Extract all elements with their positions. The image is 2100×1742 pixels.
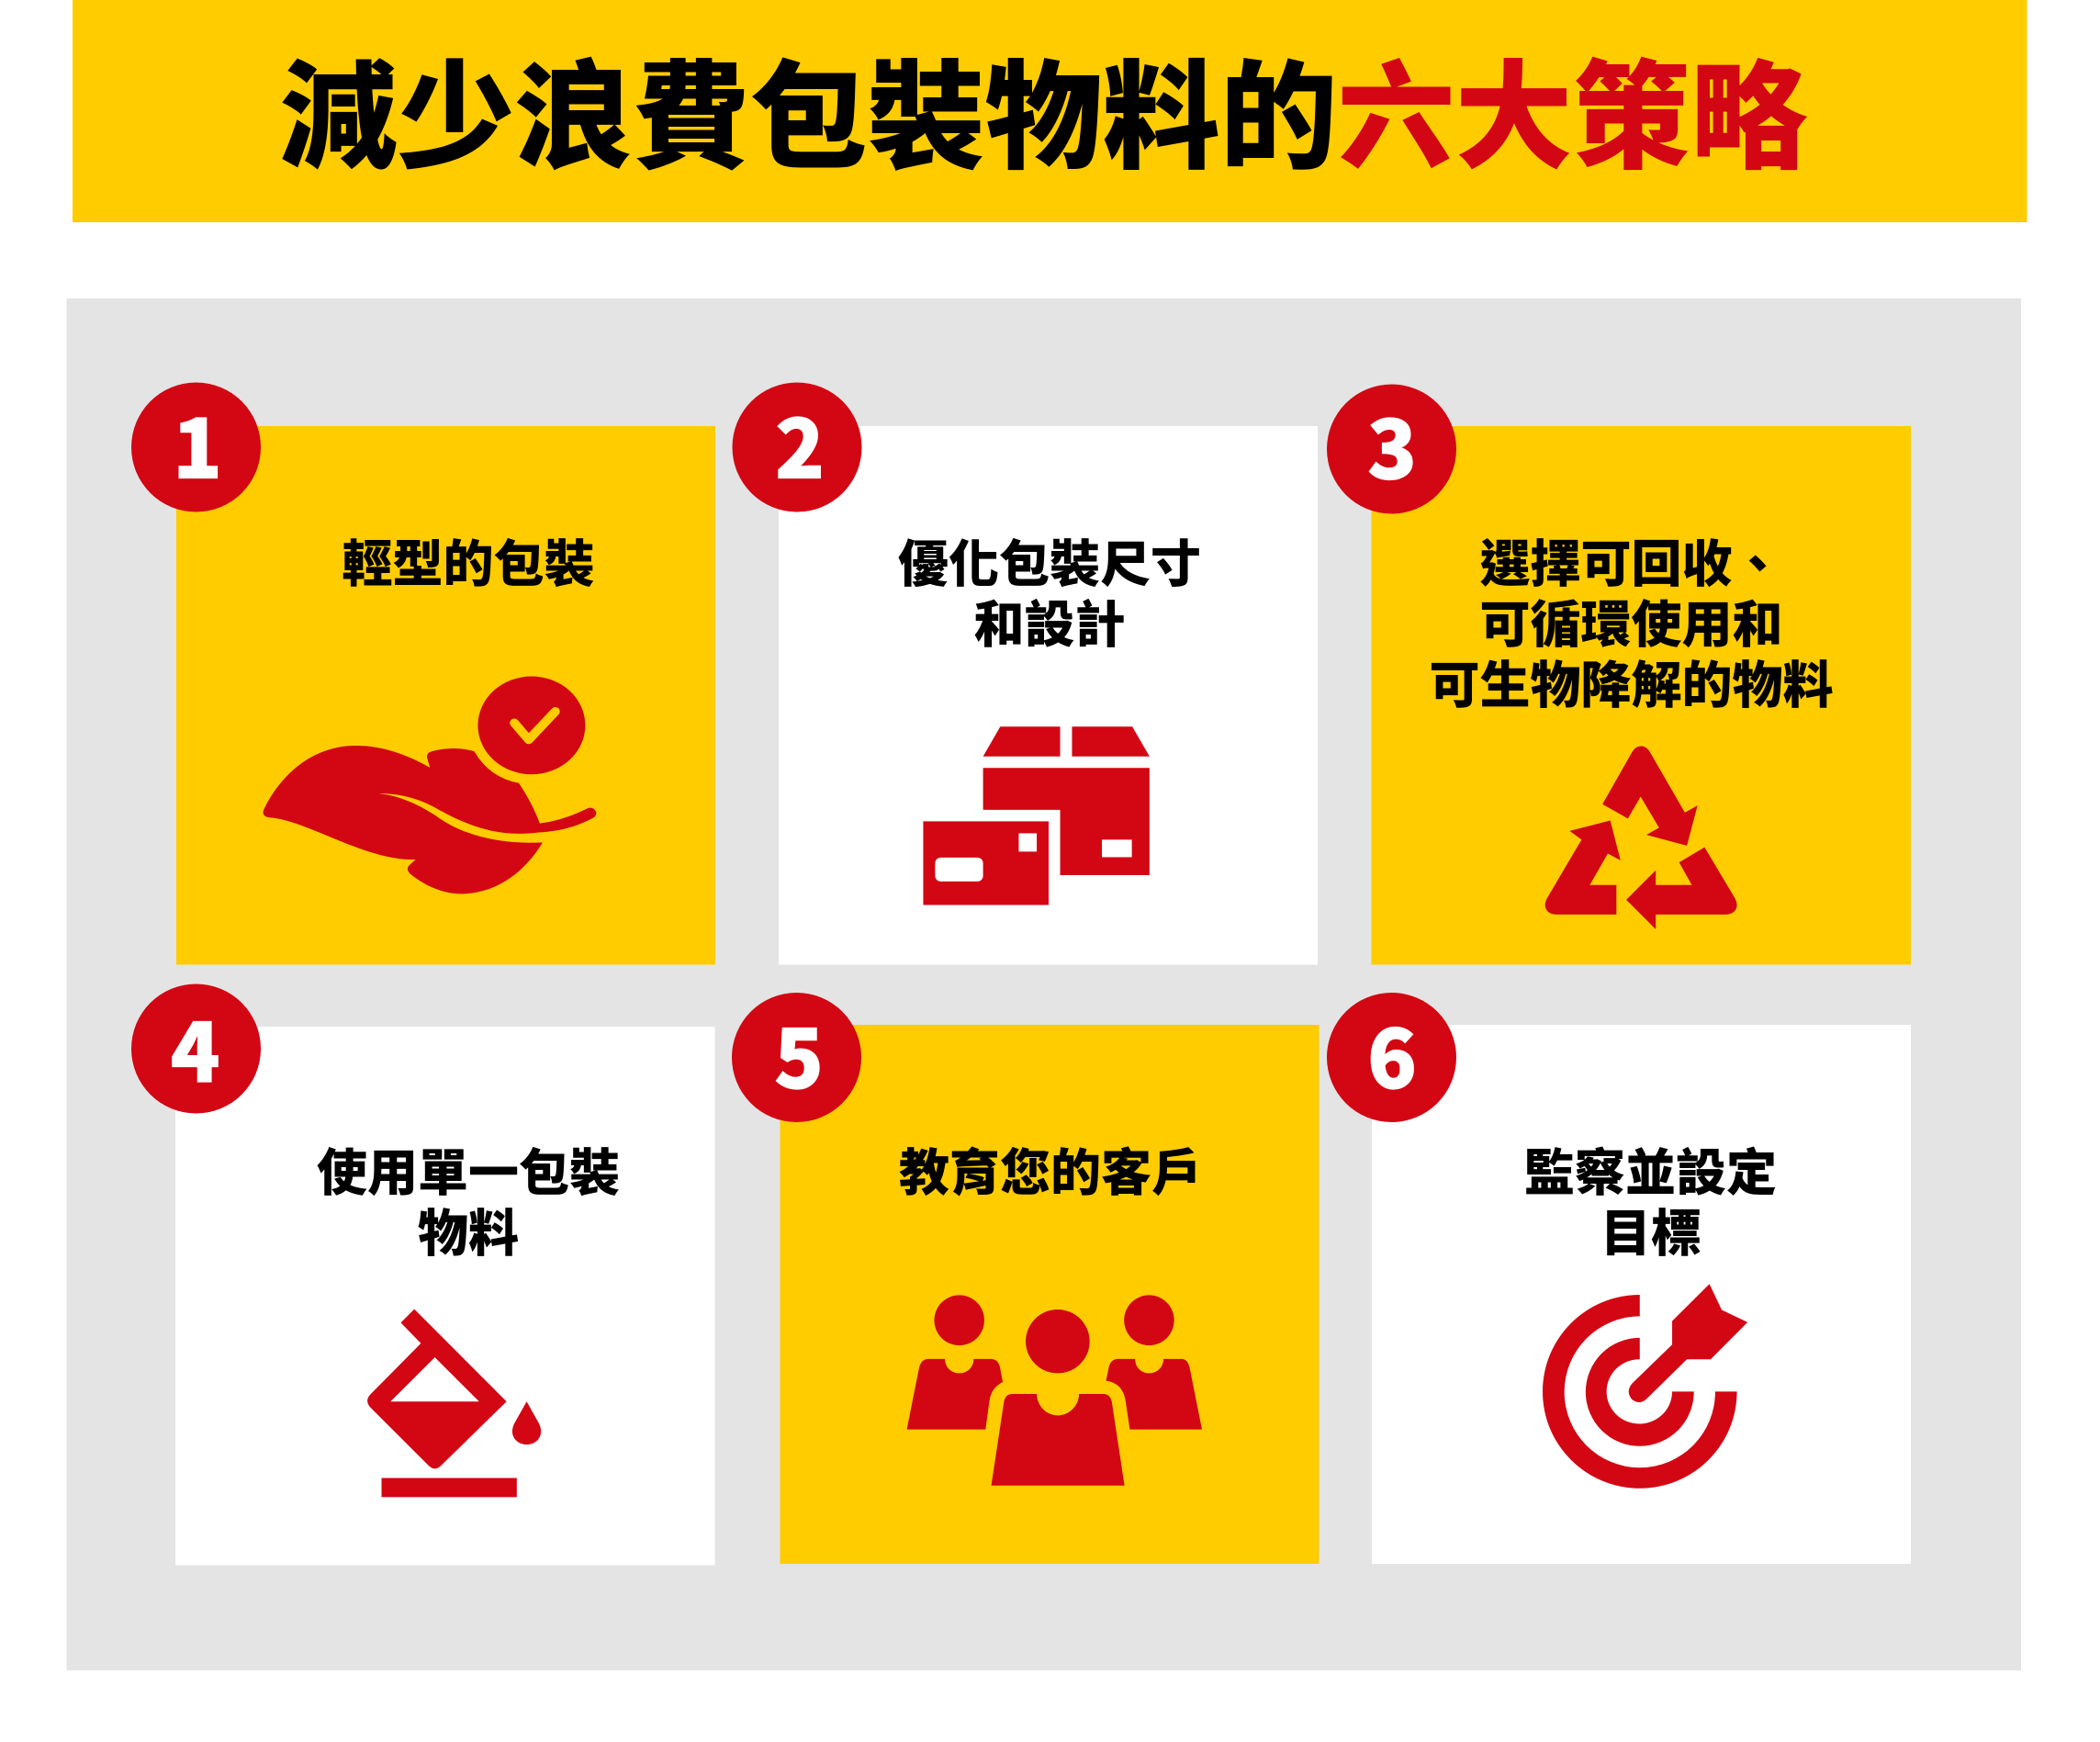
heading 3: 可生物降解的物料 — [1429, 645, 1834, 718]
number badge 2 — [733, 382, 861, 512]
heading 3: 選擇可回收、 — [1479, 523, 1783, 597]
number badge 6: 6 — [1367, 995, 1417, 1112]
number badge 1 — [131, 382, 261, 512]
panel: card 2 optimise size and design — [733, 382, 1318, 964]
number badge 5: 5 — [774, 995, 824, 1112]
panel: strategies background — [66, 298, 2021, 1670]
title banner — [73, 0, 2027, 222]
icon: recycle arrows — [1545, 747, 1737, 929]
heading 6: 目標 — [1600, 1193, 1701, 1266]
heading 4: 使用單一包裝 — [317, 1132, 620, 1206]
number badge 3 — [1327, 384, 1456, 514]
number badge 1: 1 — [173, 386, 222, 501]
number badge 4: 4 — [171, 989, 219, 1106]
heading 1: 輕型的包裝 — [342, 523, 595, 597]
title: 減少浪費包裝物料的六大策略 — [279, 22, 1808, 193]
heading 2: 和設計 — [973, 584, 1126, 657]
icon: boxes — [923, 726, 1150, 905]
icon: feather leaf with check — [263, 677, 596, 893]
number badge 5 — [732, 993, 861, 1122]
icon: paint bucket — [367, 1309, 541, 1497]
heading 2: 優化包裝尺寸 — [898, 523, 1201, 597]
heading 5: 教育您的客戶 — [899, 1132, 1202, 1206]
heading 3: 可循環使用和 — [1479, 584, 1783, 657]
panel: card 6 monitor and set targets — [1327, 993, 1911, 1564]
number badge 4 — [131, 984, 261, 1113]
panel: card 1 lightweight packaging — [131, 382, 715, 964]
panel: card 5 educate customers — [732, 993, 1319, 1564]
number badge 6 — [1327, 993, 1456, 1122]
icon: group of people — [907, 1295, 1202, 1486]
heading 6: 監察並設定 — [1524, 1132, 1777, 1206]
panel: card 3 recyclable materials — [1327, 384, 1911, 964]
icon: target with arrow — [1543, 1284, 1747, 1489]
number badge 2: 2 — [775, 386, 825, 501]
panel: card 4 single material — [131, 984, 714, 1565]
heading 4: 物料 — [418, 1193, 519, 1266]
number badge 3: 3 — [1367, 386, 1417, 503]
